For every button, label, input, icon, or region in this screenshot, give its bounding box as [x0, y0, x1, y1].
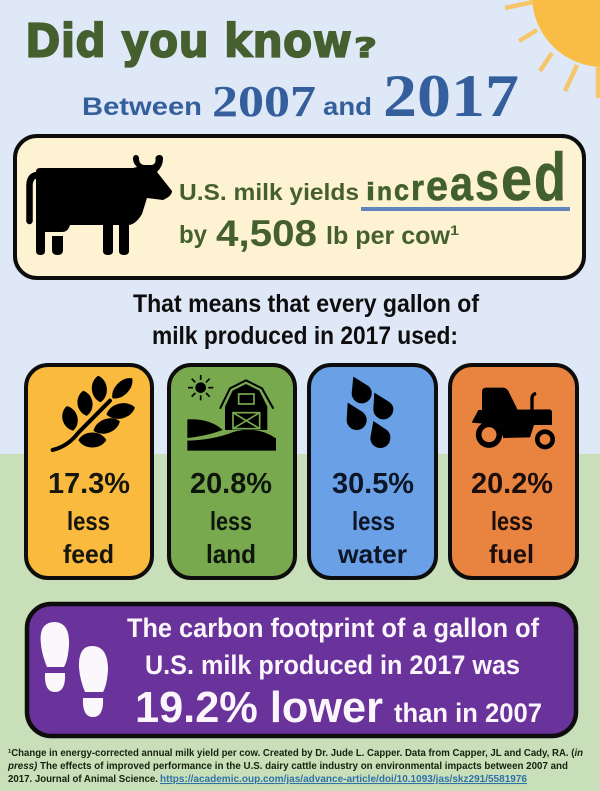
subtitle: between 2007 and 2017: and	[323, 93, 372, 121]
icon: barn and sun	[187, 375, 276, 451]
panel: fuel	[450, 365, 577, 578]
subtitle: between 2007 and 2017: 2007	[212, 77, 316, 126]
text: 20.2% less fuel	[471, 468, 553, 569]
text: increased: c	[394, 174, 409, 207]
icon: footprints	[41, 622, 108, 717]
icon: sun	[505, 0, 600, 98]
title: ?	[354, 33, 377, 64]
text: that means: That means that every gallon of	[133, 290, 480, 318]
text: carbon footprint statement: The carbon footprint of a gallon of	[127, 613, 540, 643]
text: 30.5% less water: 30.5%	[332, 468, 414, 500]
text: by 4,508 lb per cow: lb per cow	[326, 222, 451, 250]
text: 17.3% less feed: less	[67, 506, 110, 536]
panel: carbon footprint	[27, 604, 576, 736]
text: by 4,508 lb per cow: by	[179, 221, 207, 249]
text: that means	[133, 290, 480, 350]
text: 20.8% less land	[190, 468, 272, 569]
text: increased: i	[366, 178, 375, 206]
text: increased: d	[534, 139, 566, 215]
subtitle: between 2007 and 2017: Between	[82, 93, 202, 121]
icon: wheat	[53, 374, 137, 450]
text: by 4,508 lb per cow: 4,508	[216, 213, 317, 254]
text: increased: r	[411, 167, 424, 208]
panel: land	[169, 365, 295, 578]
text: 20.2% less fuel: less	[491, 506, 533, 536]
text: U.S. milk yields: U.S. milk yields	[179, 179, 359, 205]
text: 20.2% less fuel: 20.2%	[471, 468, 553, 500]
text: 30.5% less water: less	[352, 506, 395, 536]
subtitle: between 2007 and 2017	[82, 63, 519, 129]
text: 17.3% less feed: feed	[63, 539, 114, 569]
text: 30.5% less water	[332, 468, 414, 569]
title: Did you know	[25, 14, 352, 68]
text: by 4,508 lb per cow: 1	[450, 222, 459, 238]
text: increased: n	[377, 176, 392, 206]
panel: milk yields	[15, 136, 584, 278]
panel: feed	[26, 365, 152, 578]
text: carbon footprint statement: U.S. milk produced in 2017 was	[145, 650, 520, 680]
icon: cow	[30, 155, 172, 255]
text: 20.2% less fuel: fuel	[489, 539, 534, 569]
icon: tractor	[472, 388, 553, 447]
text: carbon footprint statement: than in 2007	[394, 698, 542, 728]
text: 17.3% less feed	[48, 468, 130, 569]
subtitle: between 2007 and 2017: 2017	[383, 63, 519, 129]
footnote: https://academic.oup.com/jas/advance-article/doi/10.1093/jas/skz291/5581976	[160, 773, 527, 785]
text: 20.8% less land: less	[210, 506, 252, 536]
text: increased: e	[501, 145, 532, 214]
text: increased	[366, 139, 566, 215]
text: increased: s	[475, 152, 499, 212]
icon: water drops	[347, 377, 393, 448]
text: by 4,508 lb per cow	[179, 213, 459, 254]
text: increased: e	[426, 162, 448, 209]
text: 17.3% less feed: 17.3%	[48, 468, 130, 500]
footnote	[7, 747, 583, 785]
text: carbon footprint statement: 19.2% lower	[135, 683, 383, 732]
text: 30.5% less water: water	[337, 539, 407, 569]
text: 20.8% less land: 20.8%	[190, 468, 272, 500]
footnote: press) The effects of improved performance in the U.S. dairy cattle industry on environmental impacts between 2007 and	[7, 760, 568, 772]
text: 20.8% less land: land	[206, 539, 256, 569]
text: carbon footprint statement	[127, 613, 542, 732]
footnote: 2017. Journal of Animal Science.	[8, 773, 158, 785]
text: increased: a	[450, 158, 473, 211]
panel: water	[309, 365, 436, 578]
text: that means: milk produced in 2017 used:	[152, 322, 458, 350]
